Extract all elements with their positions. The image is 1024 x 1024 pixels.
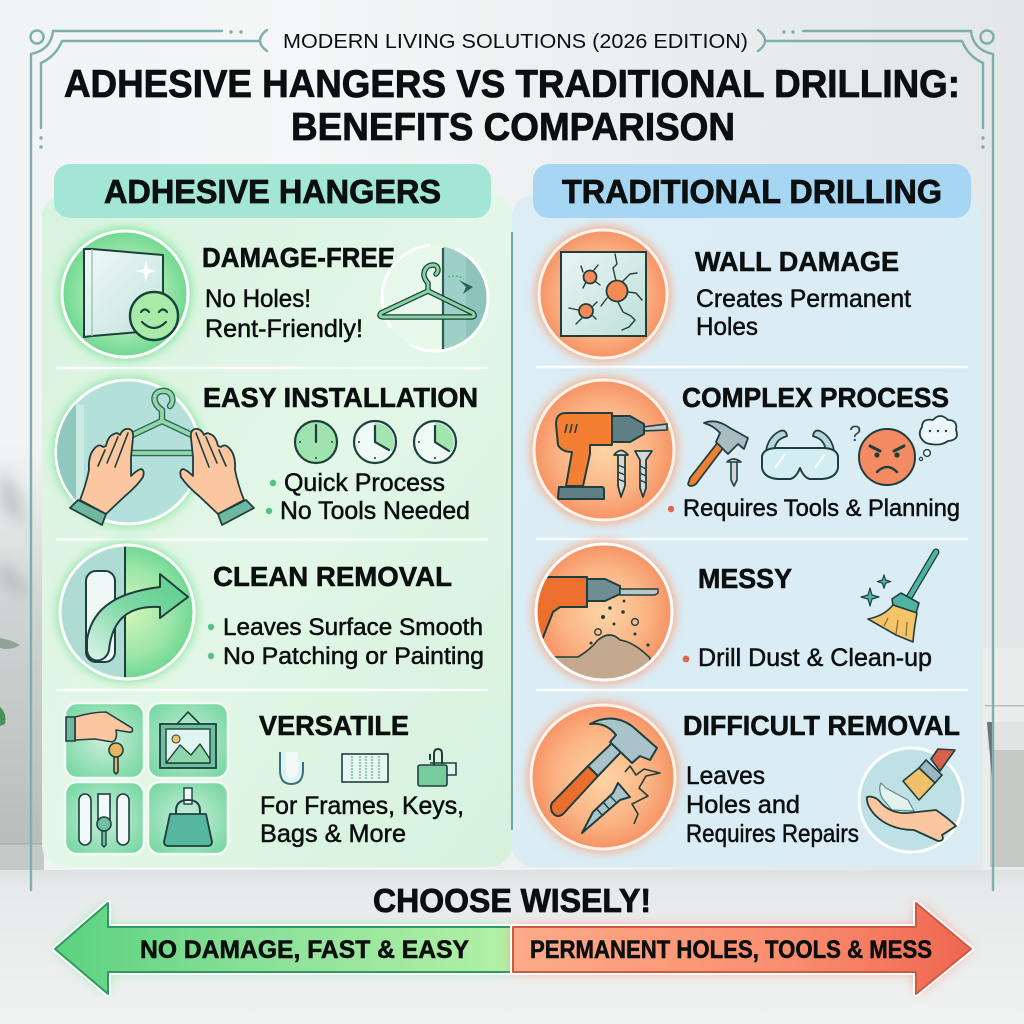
- text: quick process, no tools needed: [266, 469, 470, 525]
- heading: complex process: COMPLEX PROCESS: [682, 382, 949, 413]
- text: leaves holes and requires repairs: Holes and: [686, 791, 800, 819]
- heading: clean removal: CLEAN REMOVAL: [213, 561, 452, 592]
- heading: damage-free: DAMAGE-FREE: [202, 242, 395, 273]
- text: leaves surface smooth, no patching: [208, 614, 484, 670]
- panel: adhesive hangers: ADHESIVE HANGERS: [104, 173, 441, 210]
- arrow: green no damage: NO DAMAGE, FAST & EASY: [140, 936, 469, 964]
- title: [64, 63, 960, 149]
- heading: versatile: VERSATILE: [259, 710, 409, 741]
- icon: damage-free wall with smiley: [59, 228, 191, 360]
- icon: angry face with thought cloud: ?: [849, 421, 861, 446]
- icon: drill with dust pile: [530, 541, 675, 690]
- icon: hanger at wall edge: [380, 245, 496, 355]
- icon: cracked wall with holes: [536, 227, 670, 361]
- panel: traditional drilling: [512, 164, 982, 867]
- text: for frames, keys, bags and more: Bags & More: [260, 820, 406, 848]
- arrow: red permanent holes: PERMANENT HOLES, TOOLS & MESS: [530, 936, 932, 964]
- text: no holes rent-friendly: [205, 285, 363, 343]
- icon: paint brush and putty in hand: [859, 748, 963, 852]
- text: drill dust and clean-up: Drill Dust & Clean-up: [698, 644, 932, 672]
- title: ADHESIVE HANGERS VS TRADITIONAL DRILLING:: [64, 63, 960, 106]
- icon: tile hand with key: [65, 703, 144, 778]
- icon: safety goggles: [762, 431, 838, 479]
- icon: hammer and damaged screw: [528, 702, 678, 852]
- text: for frames, keys, bags and more: [260, 792, 464, 848]
- icon: three clocks: [295, 421, 456, 463]
- text: creates permanent holes: Creates Permanent: [696, 285, 911, 313]
- text: for frames, keys, bags and more: For Frames, Keys,: [260, 792, 464, 820]
- heading: easy installation: EASY INSTALLATION: [203, 382, 478, 413]
- icon: power drill and screws: [531, 377, 677, 523]
- text: quick process, no tools needed: Quick Process: [284, 469, 445, 497]
- icon: tile framed picture: [148, 703, 228, 778]
- text: no holes rent-friendly: Rent-Friendly!: [205, 315, 363, 343]
- arrow: green no damage: [55, 903, 511, 994]
- text: leaves holes and requires repairs: Leaves: [686, 762, 765, 790]
- icon: hammer and nail: [688, 421, 748, 486]
- text: leaves surface smooth, no patching: Leaves Surface Smooth: [223, 614, 483, 641]
- text: leaves holes and requires repairs: [686, 762, 859, 848]
- text: quick process, no tools needed: No Tools Needed: [280, 497, 470, 525]
- heading: messy: MESSY: [698, 563, 792, 594]
- text: creates permanent holes: [696, 285, 911, 341]
- decorative frame: [30, 30, 994, 890]
- panel: adhesive hangers: [42, 164, 512, 867]
- text: requires tools and planning: Requires Tools & Planning: [683, 495, 960, 522]
- icon: angry face with thought cloud: [849, 416, 957, 485]
- heading: difficult removal: DIFFICULT REMOVAL: [683, 710, 960, 741]
- text: creates permanent holes: Holes: [696, 313, 758, 341]
- icon: hands placing hanger: [50, 377, 254, 530]
- heading: choose wisely: CHOOSE WISELY!: [373, 882, 651, 919]
- icon: tile adhesive strips with key: [65, 782, 144, 854]
- heading: wall damage: WALL DAMAGE: [695, 246, 899, 277]
- icon: broom with sparkles: [861, 552, 936, 642]
- text: no holes rent-friendly: No Holes!: [205, 285, 311, 313]
- icon: clean removal arrow: [55, 540, 197, 690]
- text: leaves holes and requires repairs: Requires Repairs: [686, 820, 859, 848]
- title: BENEFITS COMPARISON: [291, 106, 735, 149]
- icon: tile bag on hook: [148, 782, 228, 854]
- arrow: red permanent holes: [513, 903, 971, 994]
- panel: traditional drilling: TRADITIONAL DRILLING: [562, 173, 942, 210]
- icons: hook, strip and small bag: [280, 749, 456, 786]
- eyebrow text: MODERN LIVING SOLUTIONS (2026 EDITION): [283, 30, 748, 53]
- text: leaves surface smooth, no patching: No Patching or Painting: [223, 643, 484, 670]
